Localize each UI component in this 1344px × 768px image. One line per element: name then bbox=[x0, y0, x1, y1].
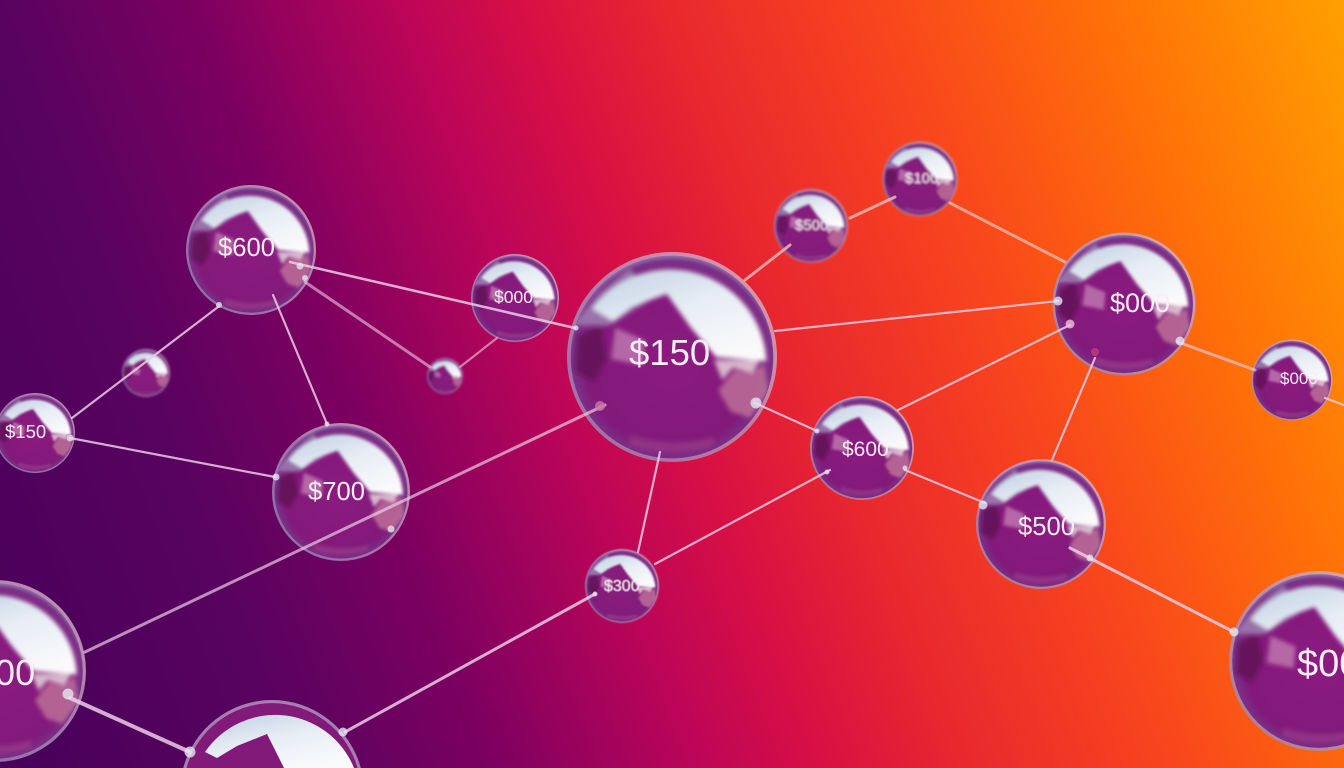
bubble: $150 central: $150 bbox=[629, 332, 710, 373]
bubble: $100 top: $100 bbox=[905, 170, 938, 187]
bubble: $100 top bbox=[882, 142, 958, 216]
bubble: $000 upper middle bbox=[471, 254, 559, 342]
bubble: $000 bottom right, cropped bbox=[1229, 571, 1344, 751]
bubble: $000 right bbox=[1052, 232, 1196, 376]
bubble: $150 far left: $150 bbox=[5, 421, 46, 442]
bubble: $700 lower left bbox=[272, 423, 410, 561]
bubble: $600 upper left bbox=[186, 185, 316, 315]
bubble: $150 far left bbox=[0, 393, 75, 473]
bubble: $300 bottom middle: $300 bbox=[604, 578, 640, 595]
bubble: $500 lower right bbox=[976, 459, 1106, 589]
bubble: $000 upper middle: $000 bbox=[494, 287, 533, 307]
bubble: small unlabelled middle bbox=[427, 358, 463, 394]
bubble: $000 far right bbox=[1252, 340, 1332, 420]
connector lines bbox=[70, 197, 1344, 752]
bubble: $000 far right: $000 bbox=[1280, 369, 1318, 388]
bubble: $600 upper left: $600 bbox=[218, 234, 275, 262]
bubble: $600 center right: $600 bbox=[842, 438, 889, 461]
bubble: $150 central bbox=[567, 252, 777, 462]
bubble: $300 bottom middle bbox=[585, 549, 659, 623]
bubble: $600 center right bbox=[810, 396, 914, 500]
connector nodes bbox=[62, 262, 1238, 758]
bubble: $500 top bbox=[774, 189, 848, 263]
bubble: $000 bottom left, cropped bbox=[0, 580, 86, 762]
bubble: $500 top: $500 bbox=[795, 217, 828, 234]
bubble: small unlabelled left bbox=[122, 349, 170, 397]
bubble: $000 right: $000 bbox=[1110, 288, 1170, 318]
bubble: unlabelled bottom, cropped bbox=[183, 700, 361, 768]
bubble: $700 lower left: $700 bbox=[308, 478, 365, 506]
bubble: $500 lower right: $500 bbox=[1018, 513, 1075, 541]
